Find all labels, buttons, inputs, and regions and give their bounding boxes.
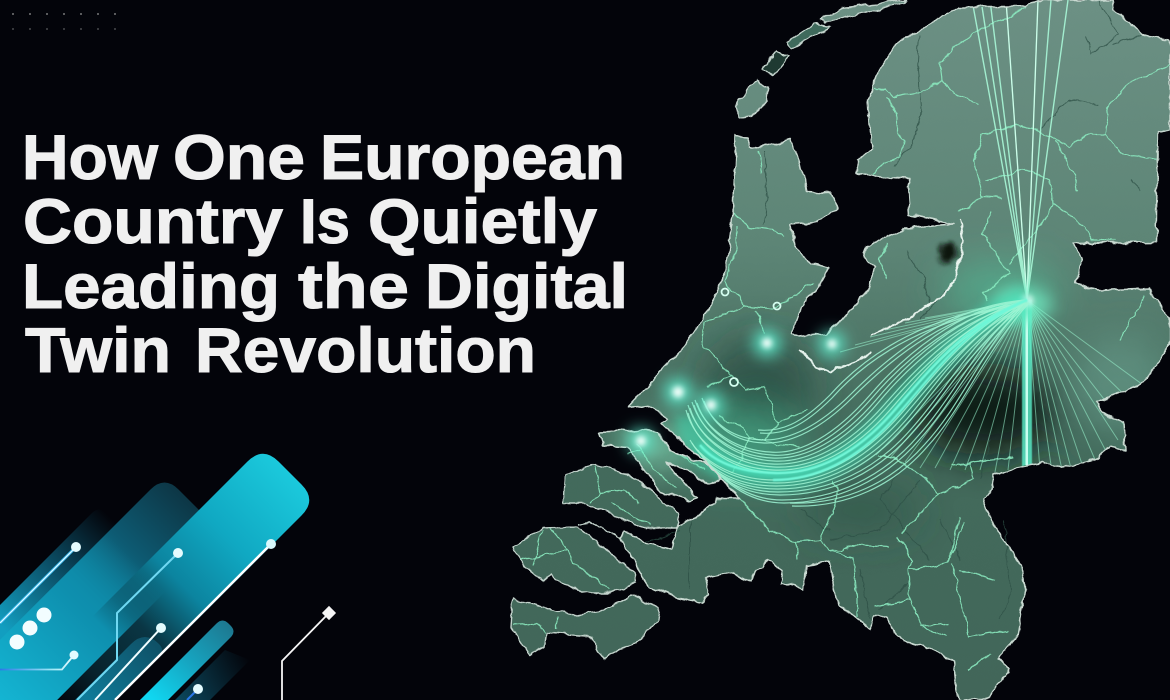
circuit bars decoration [0, 454, 336, 700]
circuit line with diamond [282, 606, 336, 700]
curved bundle [686, 300, 1029, 506]
map: islands [511, 0, 906, 658]
decorative dot grid [12, 13, 116, 30]
title: Country [23, 187, 283, 257]
title [22, 123, 628, 386]
title: Digital [425, 252, 628, 322]
island: Zeeuws-Vlaanderen [511, 596, 660, 658]
city lights [629, 288, 844, 453]
title: How [22, 123, 159, 193]
title: Quietly [368, 187, 597, 257]
coast outline [599, 0, 1170, 699]
circuit line 3 [95, 623, 166, 700]
bar: mid teal [0, 482, 216, 700]
fan: light rays from hub [840, 0, 1150, 472]
three dots [10, 608, 52, 650]
bar: faint right [175, 650, 250, 700]
central beam [1022, 300, 1032, 470]
circuit line 2 [77, 548, 183, 700]
island: Texel [736, 79, 768, 119]
title: Twin [25, 316, 171, 386]
island: Terschelling [787, 24, 831, 48]
title: Leading [22, 252, 280, 322]
title: Revolution [195, 316, 536, 386]
circuit line 4 [115, 539, 276, 700]
land fill, rivers and network [500, 0, 1170, 700]
network: green lines [513, 8, 1170, 670]
map: mainland [500, 0, 1170, 700]
title: Is [300, 187, 350, 257]
circuit line 5 [0, 650, 78, 670]
circuit line 6 [187, 684, 203, 700]
bar: mid teal lower overlay [0, 482, 216, 700]
bar: bright lower [140, 620, 234, 700]
title: European [320, 123, 625, 193]
island: Ameland [820, 0, 906, 23]
island: Vlieland [762, 51, 788, 76]
title: One [173, 123, 305, 193]
circuit line 1 [0, 542, 81, 623]
bar: dark lower [75, 637, 162, 700]
island: Schouwen [564, 465, 679, 528]
land shading [620, 262, 1170, 535]
bar: main cyan [0, 454, 309, 700]
ring markers [722, 288, 780, 386]
bar: faint left [0, 510, 116, 645]
hub glow [992, 287, 1052, 323]
title: the [298, 252, 409, 322]
thin spit [577, 522, 620, 537]
island: Walcheren [513, 527, 637, 593]
rivers: dark lines [640, 0, 1141, 620]
